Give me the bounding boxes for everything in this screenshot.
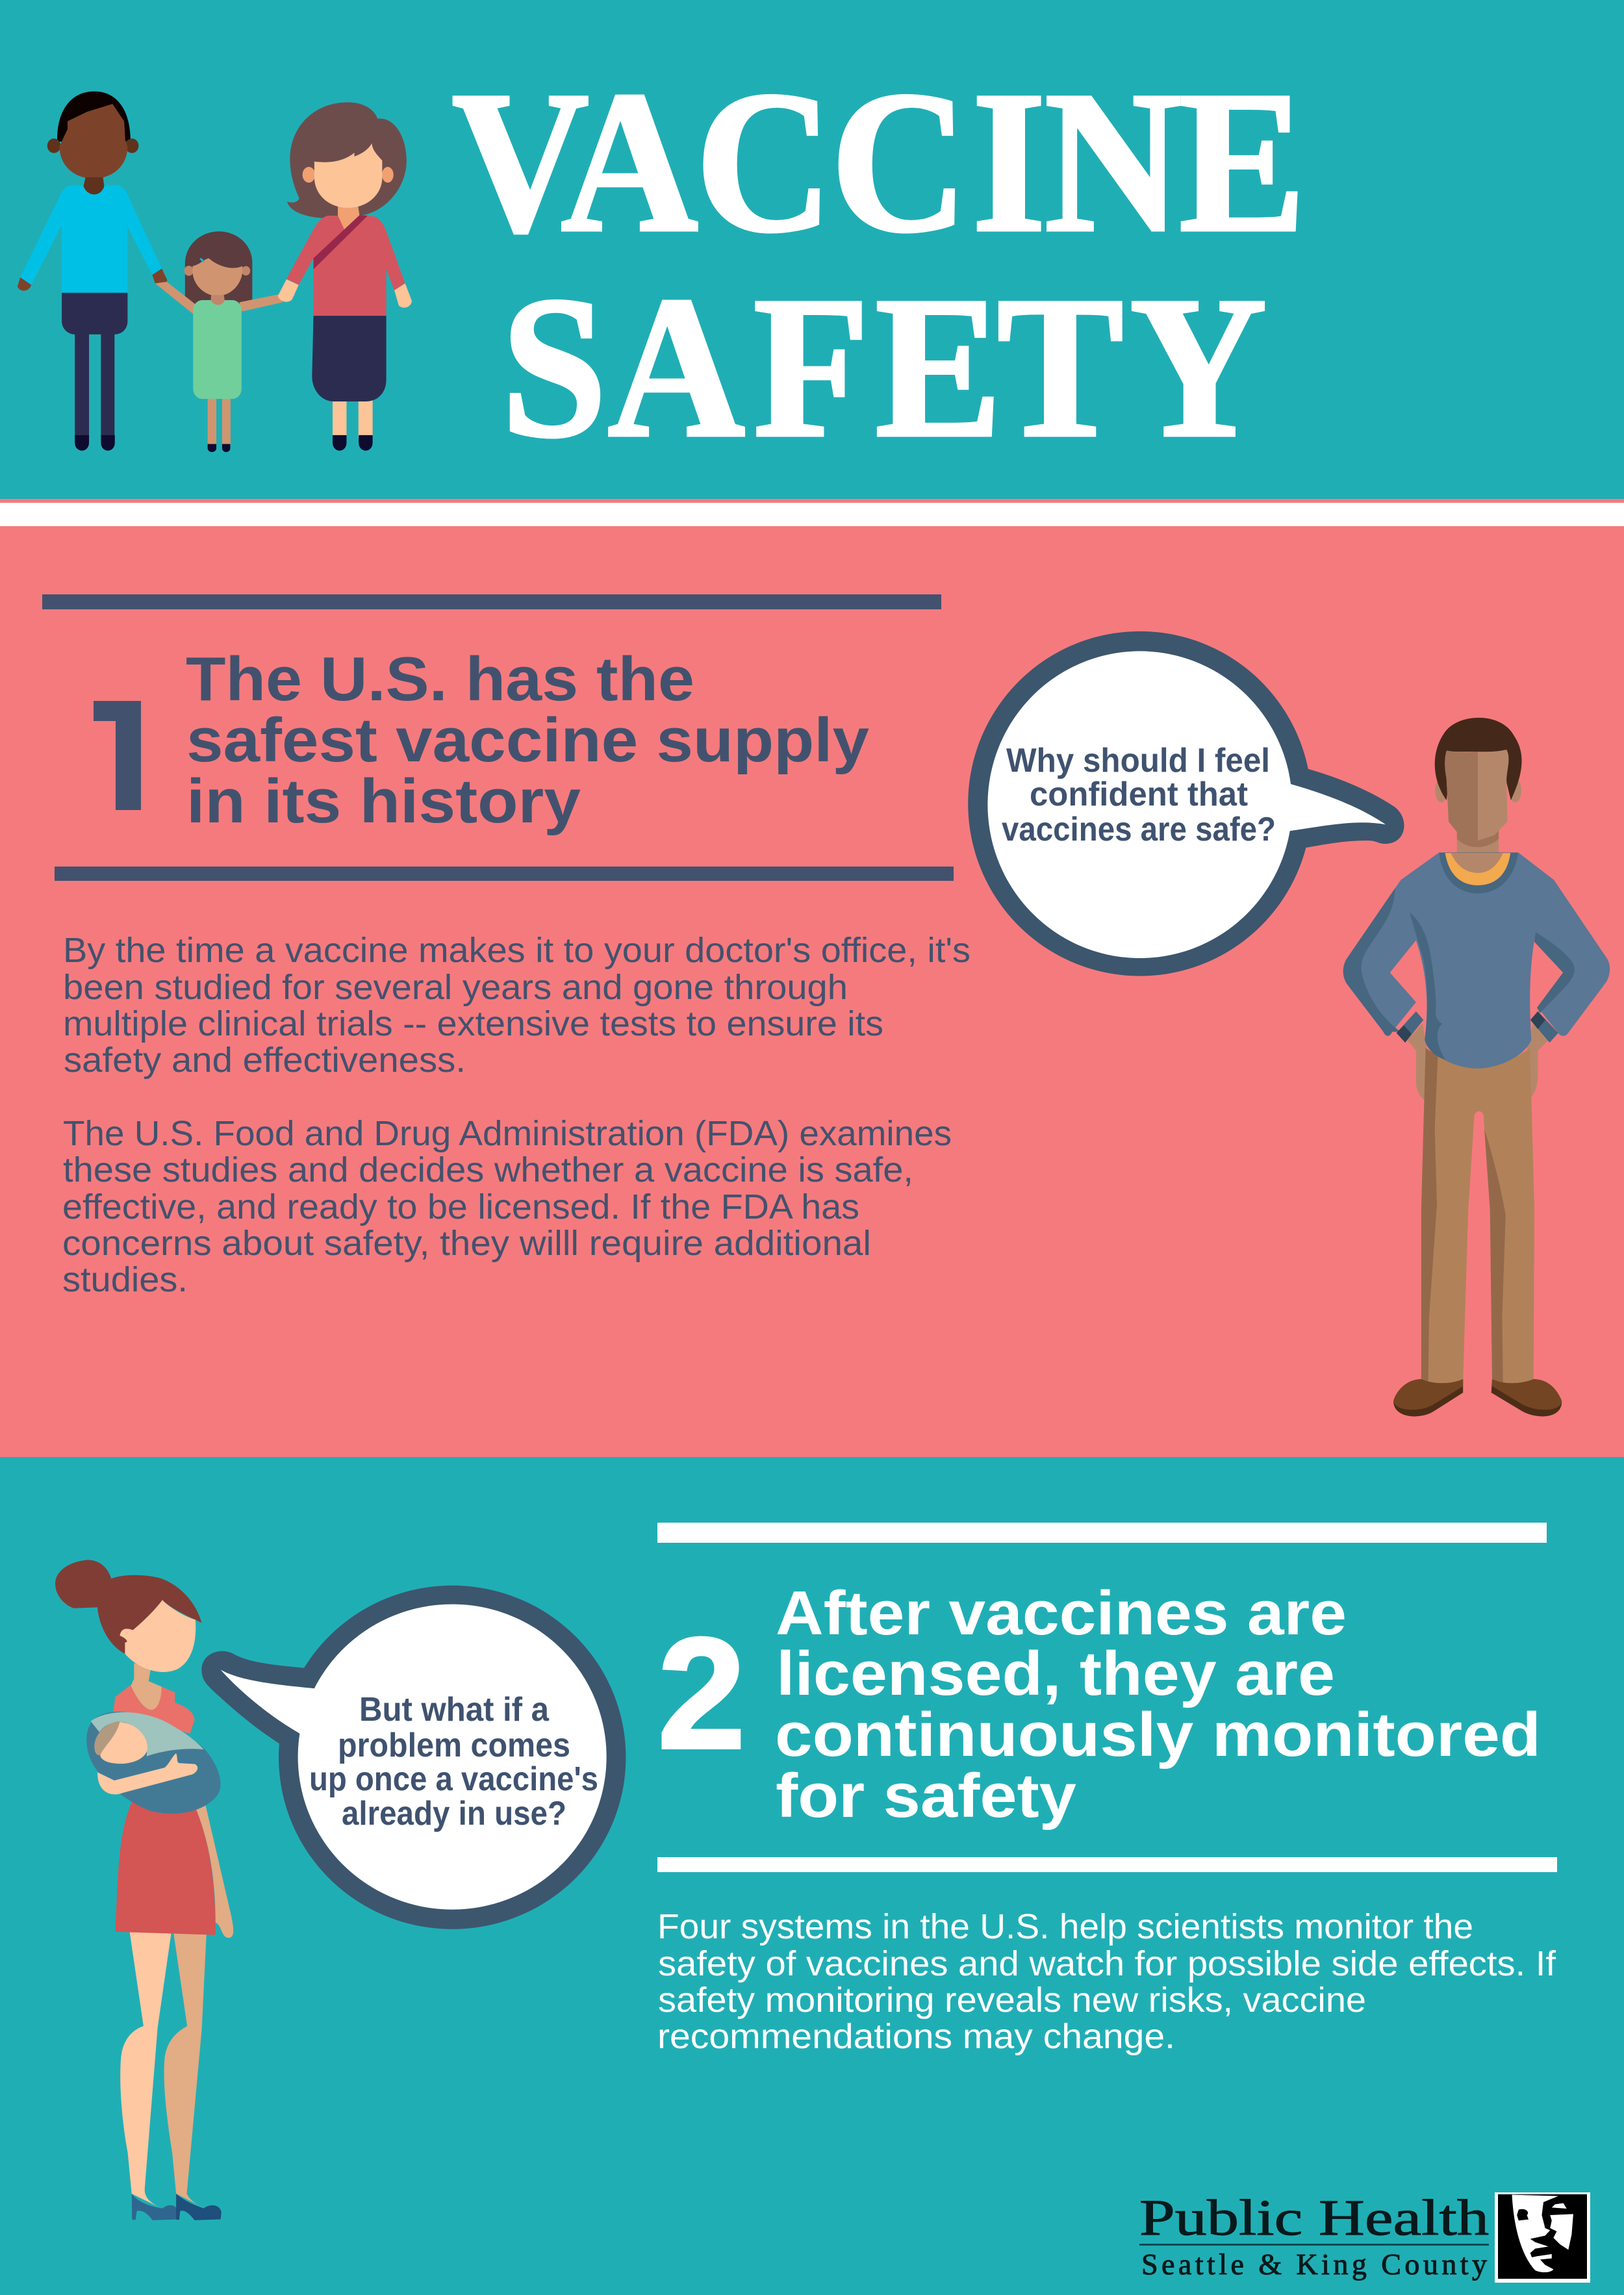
section 2 top rule <box>657 1523 1547 1543</box>
speech bubble 1 <box>968 631 1404 976</box>
title <box>452 50 1306 479</box>
section 1 bottom rule <box>55 867 954 881</box>
speech bubble 1: vaccines are safe? <box>1002 811 1276 848</box>
section 2 body text: safety monitoring reveals new risks, vaccine <box>658 1981 1366 2020</box>
illustration: woman holding baby <box>55 1560 233 2220</box>
father <box>18 92 168 451</box>
speech bubble 2: But what if a <box>359 1691 550 1729</box>
section 1 body text <box>62 931 971 1299</box>
section 1 body text: multiple clinical trials -- extensive tests to ensure its <box>63 1004 883 1043</box>
section 2 bottom rule <box>657 1857 1557 1872</box>
panel: header background <box>0 0 1624 499</box>
speech bubble 2: problem comes <box>338 1727 570 1764</box>
section 1 body text: been studied for several years and gone through <box>63 968 848 1007</box>
section 1 body text: effective, and ready to be licensed. If the FDA has <box>62 1187 859 1226</box>
panel: section 1 background <box>0 526 1624 1457</box>
section 1 body text: safety and effectiveness. <box>64 1041 466 1080</box>
section 2 number: 2 <box>657 1604 746 1782</box>
logo: Public Health Seattle & King County <box>1139 2189 1590 2283</box>
section 1 heading: safest vaccine supply <box>186 705 869 775</box>
icon: face emblem <box>1495 2192 1590 2283</box>
panel: section 2 background <box>0 1457 1624 2295</box>
section 1 body text: The U.S. Food and Drug Administration (FDA) examines <box>63 1114 952 1153</box>
logo: Public Health Seattle & King County: Public Health <box>1139 2189 1489 2246</box>
speech bubble 1: Why should I feel <box>1006 742 1270 780</box>
speech bubble 2: already in use? <box>342 1795 566 1832</box>
section 1 body text: studies. <box>62 1260 188 1299</box>
section 2 heading: licensed, they are <box>776 1639 1335 1708</box>
illustration: man with hands on hips <box>1343 718 1610 1416</box>
section 2 body text: safety of vaccines and watch for possible side effects. If <box>658 1944 1556 1983</box>
mother <box>278 103 412 451</box>
speech bubble 2 <box>201 1586 626 1929</box>
section 1 body text: these studies and decides whether a vaccine is safe, <box>63 1150 913 1189</box>
section 1 heading: in its history <box>186 767 581 836</box>
divider band <box>0 499 1624 526</box>
section 2 heading: continuously monitored <box>775 1700 1541 1769</box>
speech bubble 1: confident that <box>1030 776 1248 813</box>
logo: Public Health Seattle & King County: Seattle & King County <box>1141 2248 1487 2281</box>
section 1 number: 1 <box>84 666 173 844</box>
section 1 top rule <box>42 594 941 609</box>
section 2 body text: Four systems in the U.S. help scientists monitor the <box>657 1907 1473 1946</box>
speech bubble 2: up once a vaccine's <box>309 1760 598 1798</box>
section 2 heading: for safety <box>776 1761 1076 1831</box>
girl <box>155 231 283 452</box>
section 1 body text: By the time a vaccine makes it to your doctor's office, it's <box>63 931 971 970</box>
section 1 heading <box>186 644 869 836</box>
title: VACCINE <box>452 50 1306 274</box>
section 2 heading: After vaccines are <box>776 1579 1347 1648</box>
title: SAFETY <box>501 255 1267 479</box>
illustration: family holding hands <box>18 92 412 452</box>
section 2 body text <box>657 1907 1556 2056</box>
section 2 heading <box>775 1579 1541 1831</box>
section 1 body text: concerns about safety, they willl require additional <box>62 1224 871 1263</box>
section 2 body text: recommendations may change. <box>657 2017 1175 2056</box>
section 1 heading: The U.S. has the <box>186 644 694 714</box>
